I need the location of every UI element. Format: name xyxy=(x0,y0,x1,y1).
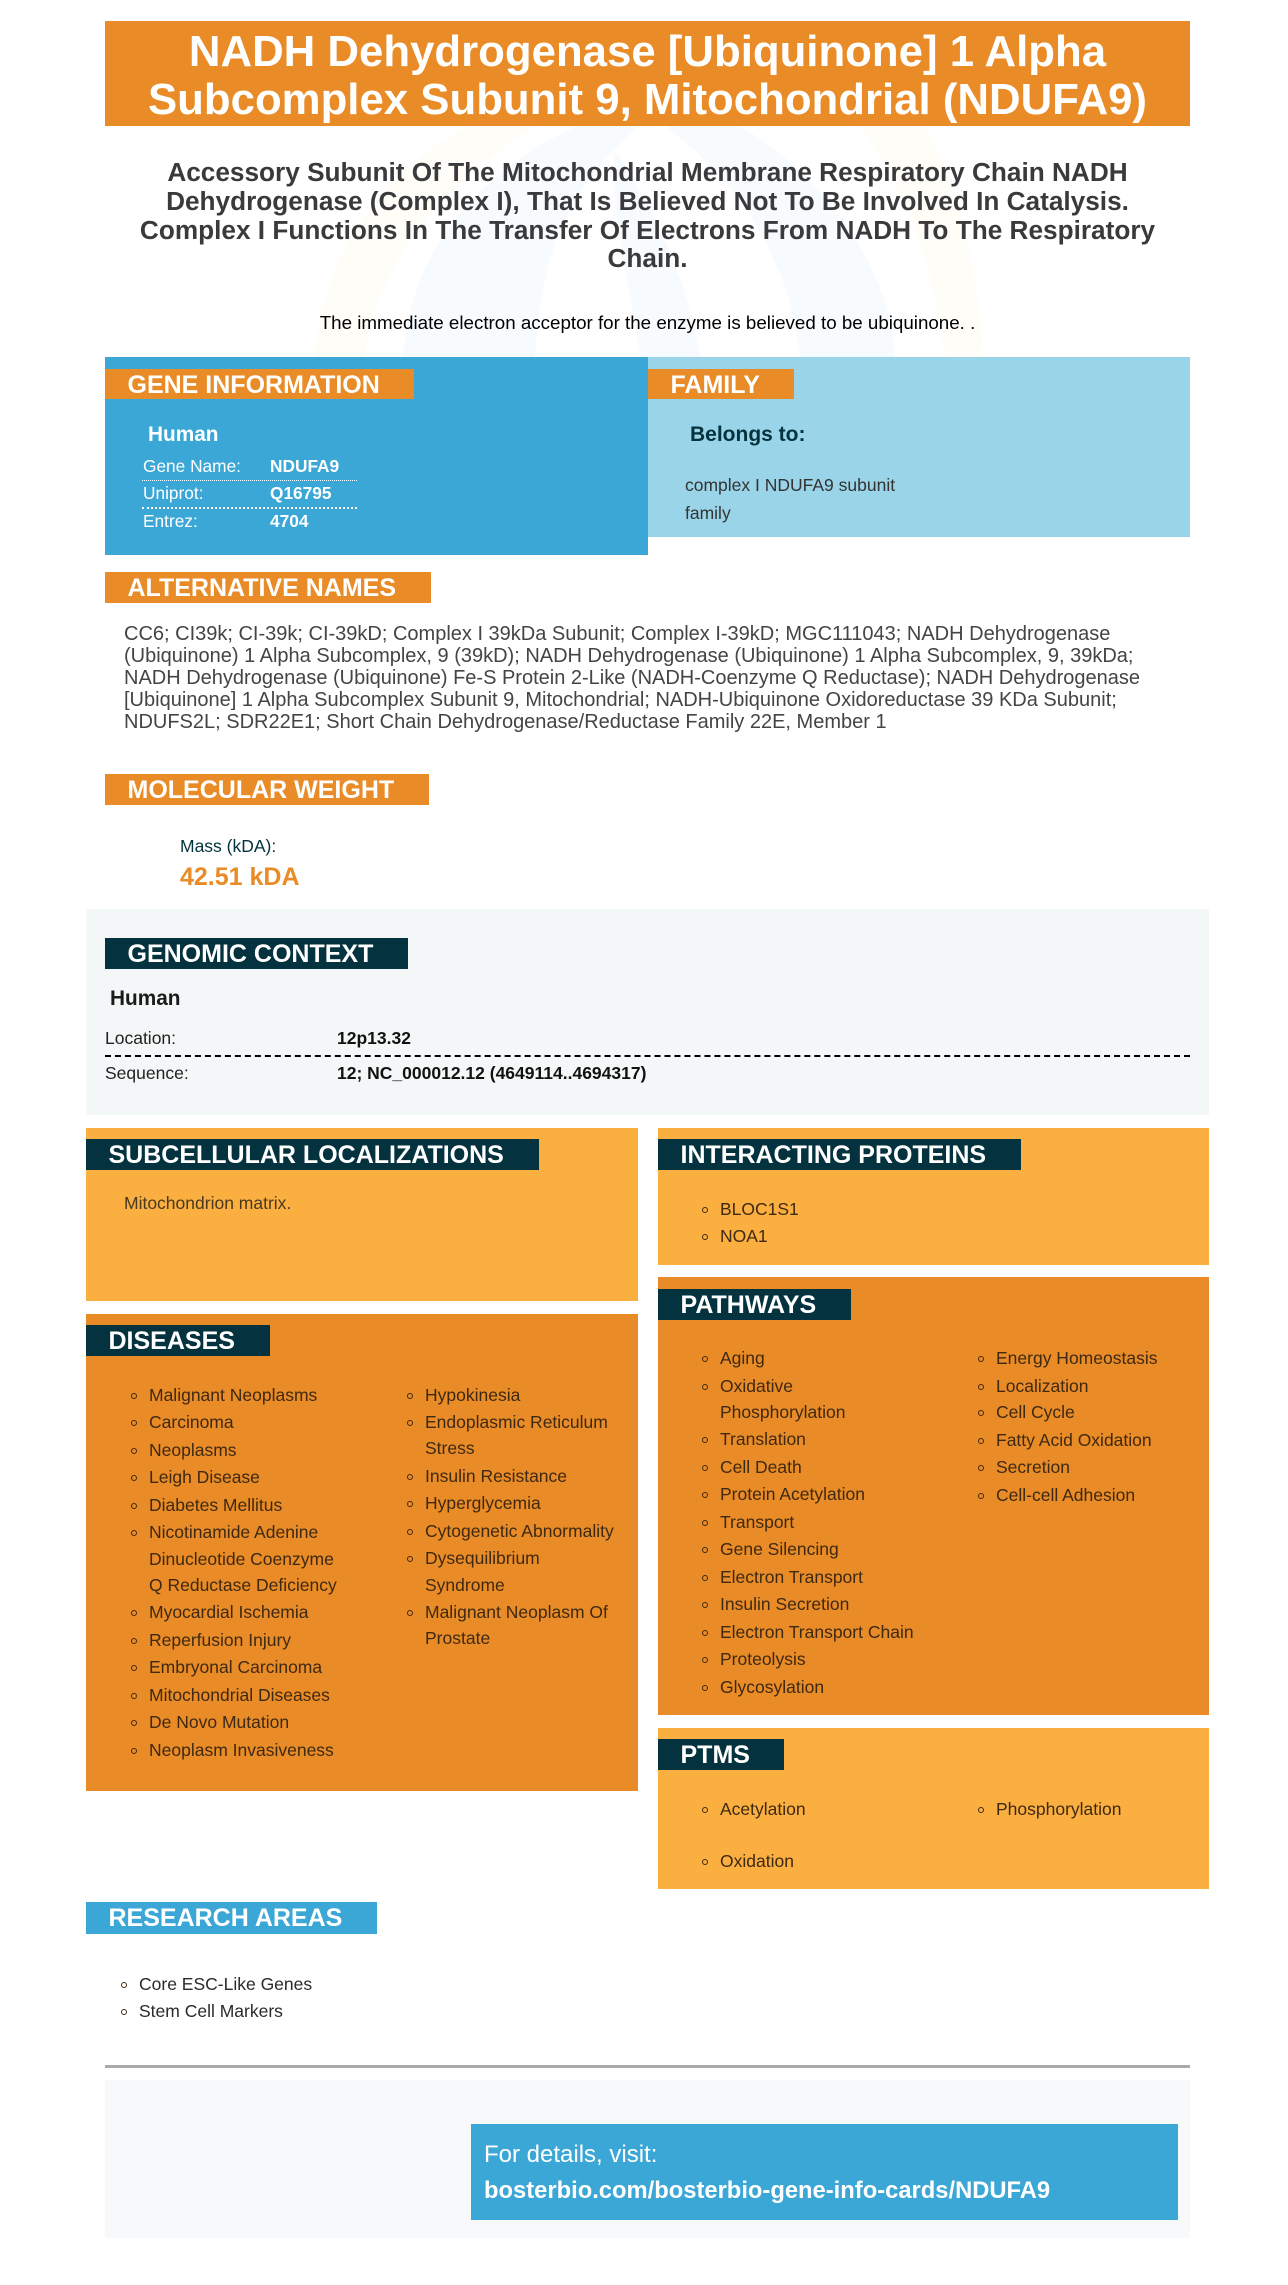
pathway list column 1: Electron Transport Chain xyxy=(720,1622,914,1642)
disease list column 2: Prostate xyxy=(425,1628,490,1648)
heading: pathways: PATHWAYS xyxy=(680,1291,816,1319)
pathway list column 1: Proteolysis xyxy=(720,1649,806,1669)
heading: molecular weight: MOLECULAR WEIGHT xyxy=(128,776,394,804)
heading: ptms xyxy=(658,1739,784,1770)
pathway list column 1: Transport xyxy=(720,1512,794,1532)
heading: genomic context: GENOMIC CONTEXT xyxy=(128,940,373,968)
disease list column 1: Malignant Neoplasms xyxy=(149,1385,317,1405)
location row: 12p13.32 xyxy=(337,1028,411,1048)
ptm list xyxy=(702,1799,1122,1871)
disease list column 1: De Novo Mutation xyxy=(149,1712,289,1732)
disease list column 2 xyxy=(407,1385,614,1648)
pathway list column 1: Protein Acetylation xyxy=(720,1484,865,1504)
callout: details link xyxy=(471,2124,1178,2220)
pathway list column 2 xyxy=(978,1348,1157,1505)
pathway list column 1: Cell Death xyxy=(720,1457,802,1477)
subtitle description: Dehydrogenase (Complex I), That Is Believed Not To Be Involved In Catalysis. xyxy=(166,186,1129,216)
gene info table: NDUFA9 xyxy=(270,456,339,476)
gene info table xyxy=(142,456,357,531)
location row: Location: xyxy=(105,1028,176,1048)
gene info table: 4704 xyxy=(270,511,308,531)
disease list column 1: Dinucleotide Coenzyme xyxy=(149,1548,334,1568)
subtitle description: Complex I Functions In The Transfer Of Electrons From NADH To The Respiratory xyxy=(140,215,1155,245)
sequence row: 12; NC_000012.12 (4649114..4694317) xyxy=(337,1063,646,1083)
pathway list column 1: Translation xyxy=(720,1429,806,1449)
disease list column 1: Diabetes Mellitus xyxy=(149,1495,282,1515)
alternative names text xyxy=(124,623,1140,733)
panel: family xyxy=(648,357,1190,537)
heading: alternative names: ALTERNATIVE NAMES xyxy=(128,574,396,602)
protein list xyxy=(702,1199,799,1246)
title banner: NADH Dehydrogenase [Ubiquinone] 1 Alpha xyxy=(189,27,1106,76)
family text: family xyxy=(685,503,731,523)
heading: family xyxy=(648,369,794,399)
pathway list column 1: Electron Transport xyxy=(720,1567,863,1587)
ptm list: Oxidation xyxy=(720,1851,794,1871)
disease list column 1: Nicotinamide Adenine xyxy=(149,1522,318,1542)
disease list column 2: Dysequilibrium xyxy=(425,1548,540,1568)
sequence row xyxy=(105,1063,646,1083)
heading: subcellular localizations: SUBCELLULAR LOCALIZATIONS xyxy=(108,1141,504,1169)
ptm list: Phosphorylation xyxy=(996,1799,1122,1819)
sequence row: Sequence: xyxy=(105,1063,189,1083)
title banner xyxy=(105,21,1190,126)
alternative names text: NDUFS2L; SDR22E1; Short Chain Dehydrogenase/Reductase Family 22E, Member 1 xyxy=(124,711,887,733)
pathway list column 1: Phosphorylation xyxy=(720,1402,846,1422)
watermark logo xyxy=(0,0,1288,360)
pathway list column 2: Energy Homeostasis xyxy=(996,1348,1157,1368)
panel: pathways xyxy=(658,1277,1209,1715)
pathway list column 1: Glycosylation xyxy=(720,1677,824,1697)
details label: For details, visit: xyxy=(484,2141,657,2168)
pathway list column 1: Aging xyxy=(720,1348,765,1368)
disease list column 1: Mitochondrial Diseases xyxy=(149,1685,330,1705)
location row xyxy=(105,1028,411,1048)
protein list: BLOC1S1 xyxy=(720,1199,799,1219)
pathway list column 1: Oxidative xyxy=(720,1376,793,1396)
family text: complex I NDUFA9 subunit xyxy=(685,475,895,495)
pathway list column 2: Cell-cell Adhesion xyxy=(996,1485,1135,1505)
research areas list xyxy=(121,1974,312,2021)
pathway list column 1: Insulin Secretion xyxy=(720,1594,849,1614)
heading: gene information: GENE INFORMATION xyxy=(128,371,380,399)
gene info table: Gene Name: xyxy=(143,456,241,476)
summary sentence: The immediate electron acceptor for the enzyme is believed to be ubiquinone. . xyxy=(320,312,975,333)
pathway list column 2: Fatty Acid Oxidation xyxy=(996,1430,1152,1450)
alternative names text: [Ubiquinone] 1 Alpha Subcomplex Subunit 9, Mitochondrial; NADH-Ubiquinone Oxidoreductase 39 KDa Subunit; xyxy=(124,689,1117,711)
panel: diseases xyxy=(86,1314,638,1791)
heading: family: FAMILY xyxy=(670,371,760,399)
disease list column 1: Neoplasms xyxy=(149,1440,237,1460)
heading: pathways xyxy=(658,1289,851,1320)
disease list column 1 xyxy=(131,1385,337,1760)
subtitle description xyxy=(140,157,1155,273)
subtitle description: Accessory Subunit Of The Mitochondrial Membrane Respiratory Chain NADH xyxy=(167,157,1128,187)
pathway list column 2: Localization xyxy=(996,1376,1088,1396)
species label: Human xyxy=(110,987,180,1010)
disease list column 1: Leigh Disease xyxy=(149,1467,260,1487)
heading: research areas: RESEARCH AREAS xyxy=(108,1904,342,1932)
disease list column 2: Cytogenetic Abnormality xyxy=(425,1521,614,1541)
alternative names text: NADH Dehydrogenase (Ubiquinone) Fe-S Protein 2-Like (NADH-Coenzyme Q Reductase); NADH Dehydrogenase xyxy=(124,667,1140,689)
panel: ptms xyxy=(658,1728,1209,1889)
pathway list column 2: Secretion xyxy=(996,1457,1070,1477)
localization text: Mitochondrion matrix. xyxy=(124,1193,291,1213)
panel: subcellular localizations xyxy=(86,1128,638,1301)
gene info table: Entrez: xyxy=(143,511,198,531)
heading: interacting proteins: INTERACTING PROTEINS xyxy=(680,1141,986,1169)
mass label: Mass (kDA): xyxy=(180,836,276,856)
details url: bosterbio.com/bosterbio-gene-info-cards/NDUFA9 xyxy=(484,2177,1050,2204)
disease list column 2: Hypokinesia xyxy=(425,1385,520,1405)
family text xyxy=(685,475,895,523)
panel: genomic context xyxy=(86,909,1209,1115)
alternative names text: CC6; CI39k; CI-39k; CI-39kD; Complex I 39kDa Subunit; Complex I-39kD; MGC111043; NADH Dehydrogenase xyxy=(124,623,1110,645)
heading: diseases: DISEASES xyxy=(108,1327,235,1355)
disease list column 1: Myocardial Ischemia xyxy=(149,1602,308,1622)
research areas list: Core ESC-Like Genes xyxy=(139,1974,312,1994)
disease list column 2: Stress xyxy=(425,1438,475,1458)
disease list column 2: Malignant Neoplasm Of xyxy=(425,1602,608,1622)
alternative names text: (Ubiquinone) 1 Alpha Subcomplex, 9 (39kD); NADH Dehydrogenase (Ubiquinone) 1 Alpha Subcomplex, 9, 39kDa; xyxy=(124,645,1133,667)
gene info table: Q16795 xyxy=(270,483,332,503)
research areas list: Stem Cell Markers xyxy=(139,2001,283,2021)
footer panel xyxy=(105,2080,1190,2238)
pathway list column 1: Gene Silencing xyxy=(720,1539,839,1559)
panel: gene information xyxy=(105,357,648,555)
species label: Human xyxy=(148,423,218,446)
pathway list column 1 xyxy=(702,1348,914,1697)
protein list: NOA1 xyxy=(720,1226,768,1246)
panel: interacting proteins xyxy=(658,1128,1209,1265)
disease list column 2: Endoplasmic Reticulum xyxy=(425,1412,608,1432)
disease list column 1: Carcinoma xyxy=(149,1412,234,1432)
gene info table: Uniprot: xyxy=(143,483,204,503)
heading: diseases xyxy=(86,1325,270,1356)
disease list column 1: Reperfusion Injury xyxy=(149,1630,291,1650)
title banner: Subcomplex Subunit 9, Mitochondrial (NDUFA9) xyxy=(148,75,1147,124)
pathway list column 2: Cell Cycle xyxy=(996,1402,1075,1422)
disease list column 1: Embryonal Carcinoma xyxy=(149,1657,322,1677)
heading: ptms: PTMS xyxy=(680,1741,750,1769)
disease list column 1: Q Reductase Deficiency xyxy=(149,1575,337,1595)
subtitle description: Chain. xyxy=(607,243,688,273)
mass value: 42.51 kDA xyxy=(180,863,300,891)
disease list column 2: Insulin Resistance xyxy=(425,1466,567,1486)
ptm list: Acetylation xyxy=(720,1799,806,1819)
disease list column 2: Hyperglycemia xyxy=(425,1493,541,1513)
belongs to label: Belongs to: xyxy=(690,423,806,446)
disease list column 1: Neoplasm Invasiveness xyxy=(149,1740,334,1760)
disease list column 2: Syndrome xyxy=(425,1574,505,1594)
